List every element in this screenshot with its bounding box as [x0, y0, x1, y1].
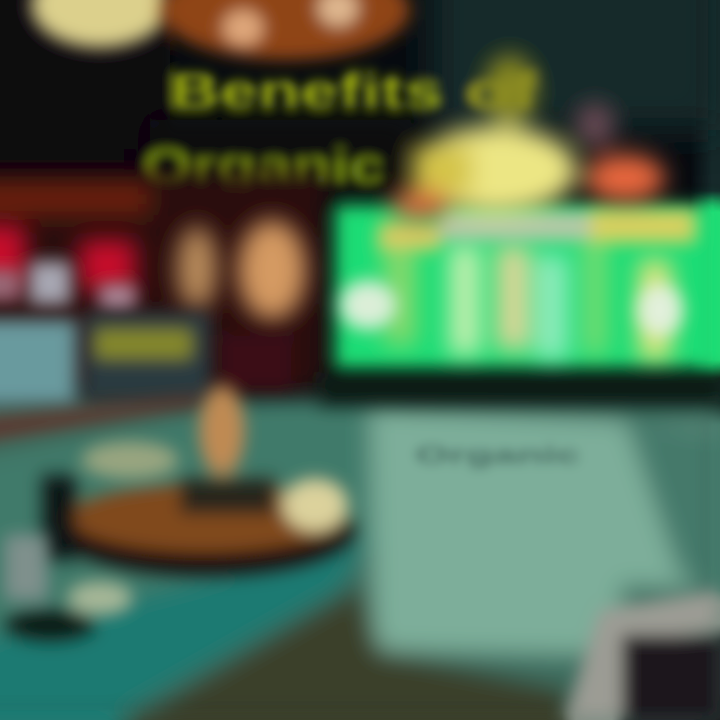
moon at top left: [32, 0, 168, 47]
background: dark upper wall: [0, 0, 720, 190]
title: [142, 63, 538, 194]
floor and teal counter: [0, 395, 720, 720]
title: of: [465, 63, 538, 119]
dark object at lower right: [565, 590, 720, 720]
dark strip under green panel: [320, 372, 720, 406]
plate with food: [42, 385, 355, 576]
green display panel: [335, 205, 720, 370]
left counter ledge: [0, 395, 200, 450]
orange lantern at top: [160, 0, 410, 60]
left info panels: [0, 312, 292, 405]
title: Organic: [142, 138, 385, 194]
small objects at lower left: [5, 535, 132, 641]
menu card heading: Organic: [415, 442, 580, 469]
yellow dome and orange top on green panel: [390, 55, 665, 221]
title: Benefits: [170, 63, 442, 119]
left shop: red awnings and lamps: [0, 175, 325, 390]
title shadow plate: [150, 120, 410, 200]
